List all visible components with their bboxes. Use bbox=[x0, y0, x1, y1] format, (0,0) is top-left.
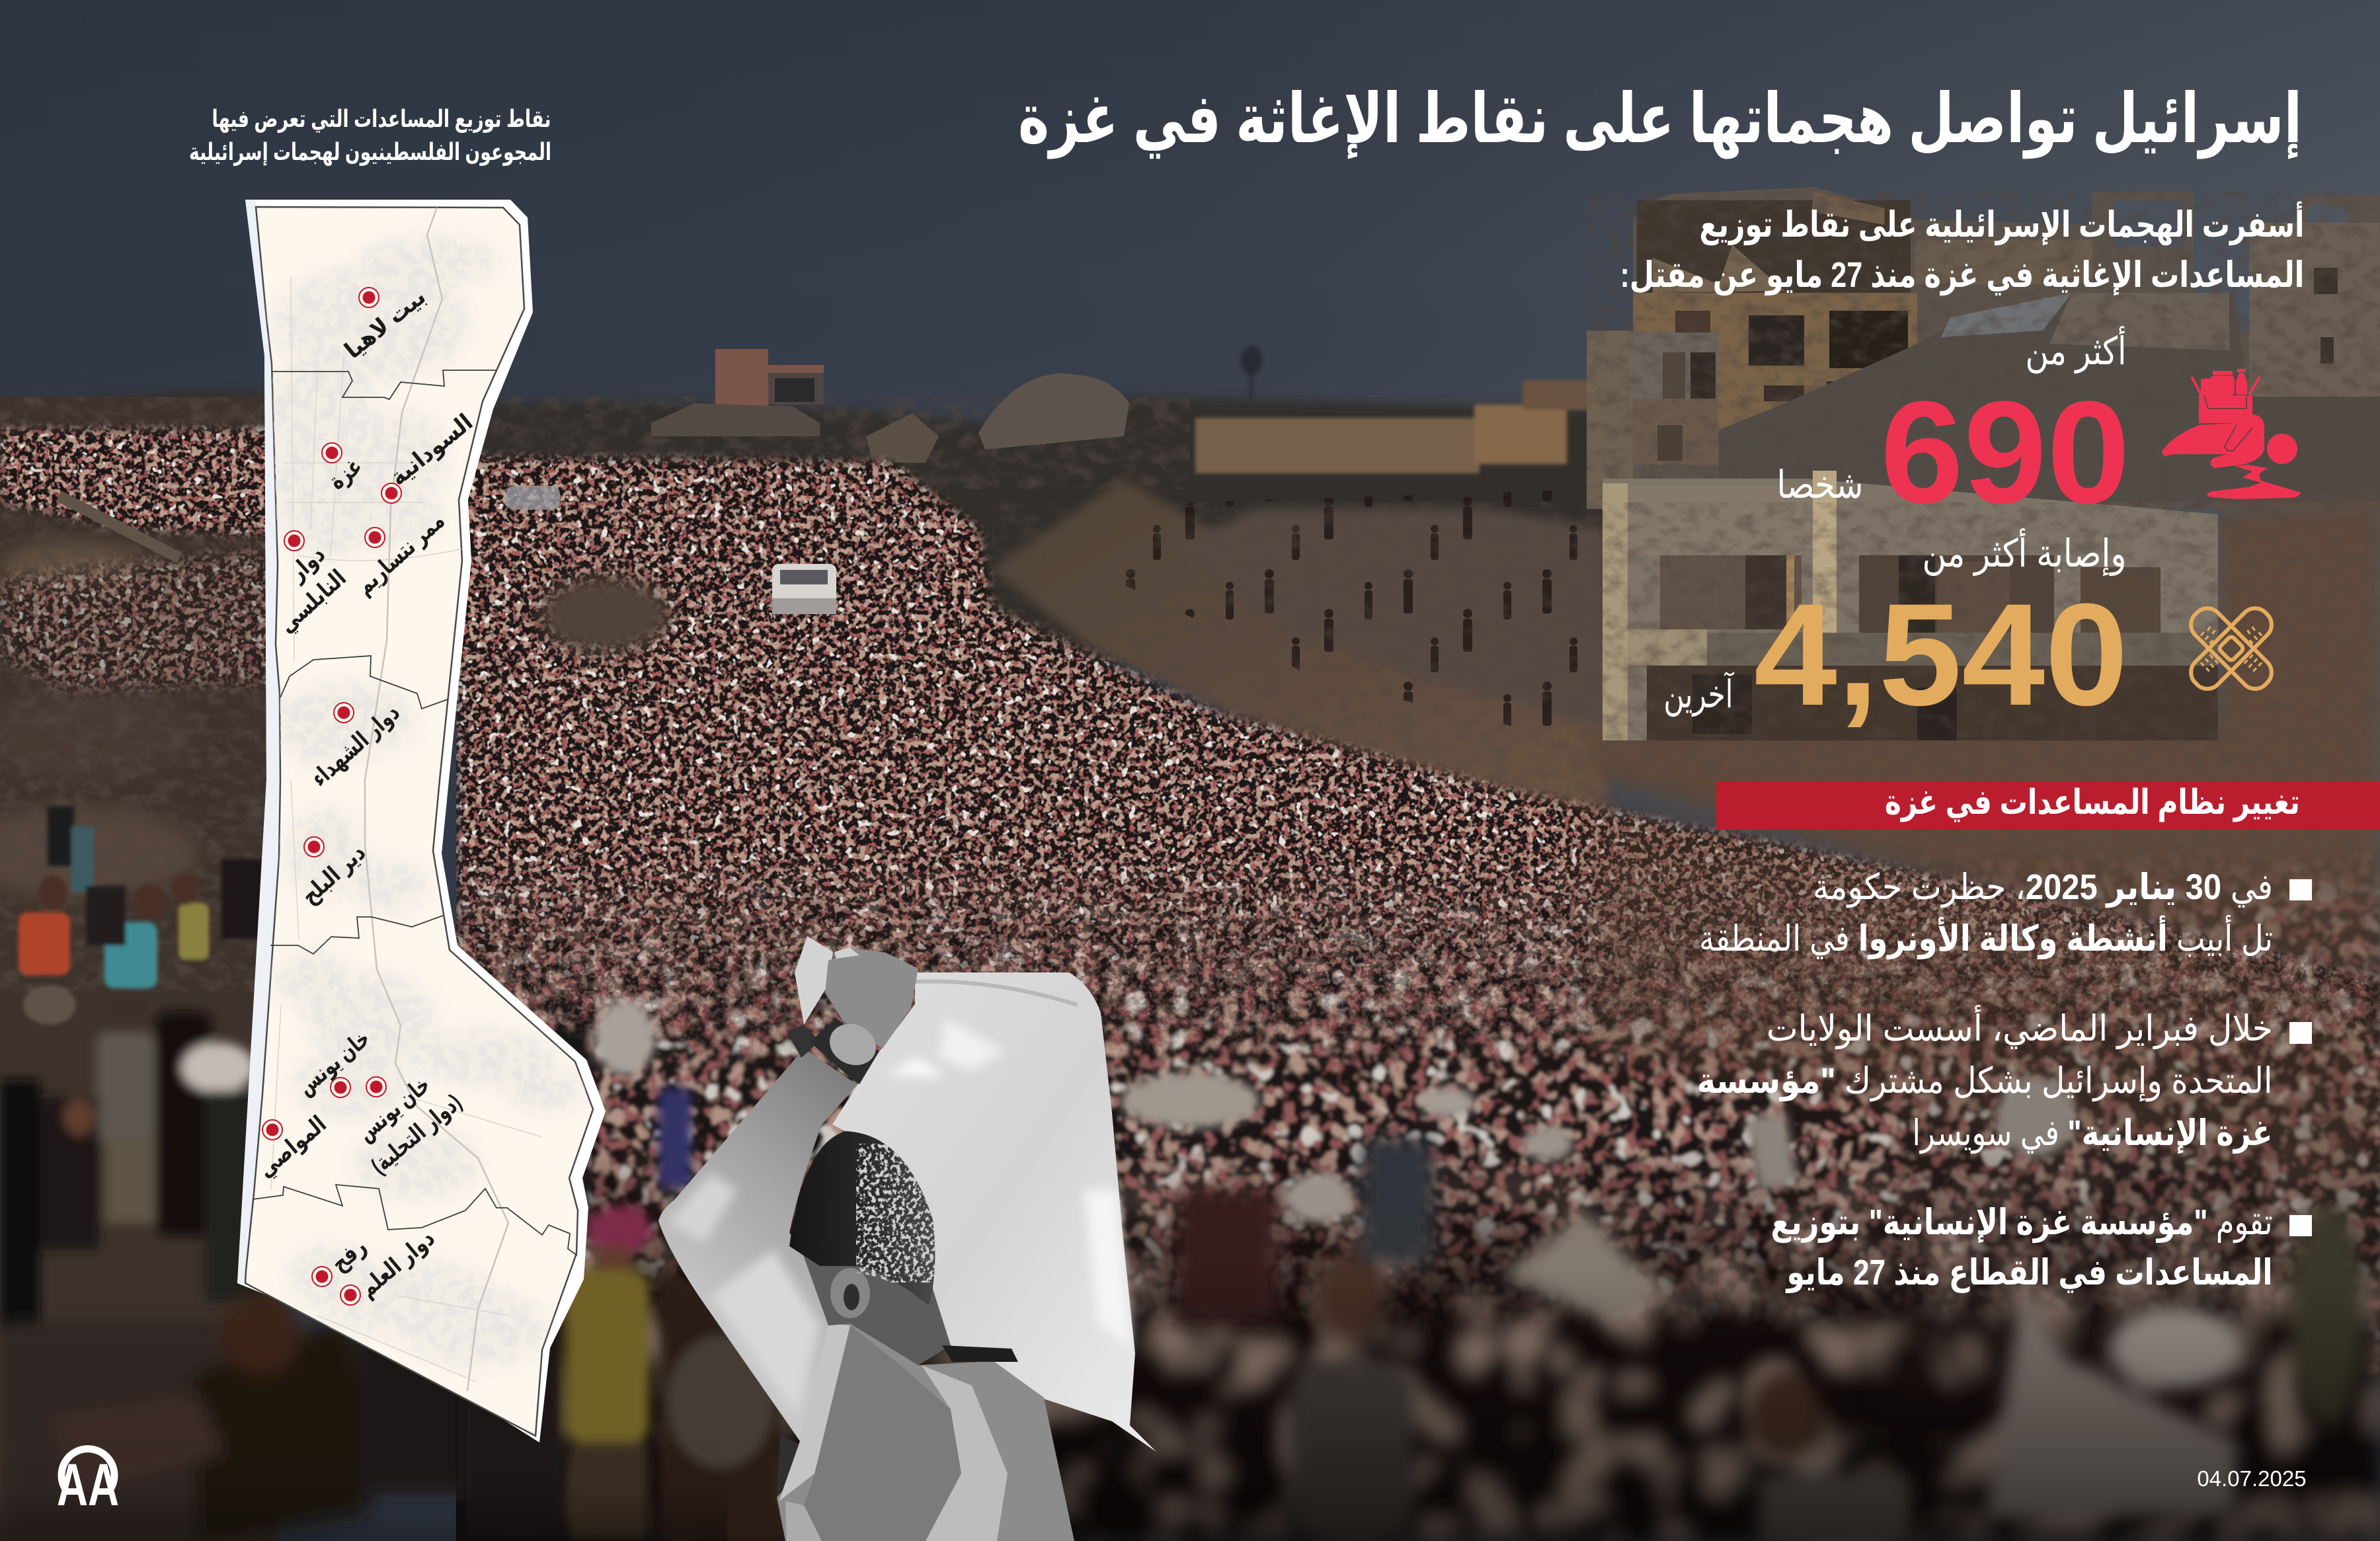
map labels: خان يونس bbox=[292, 1025, 376, 1101]
main crowd bbox=[456, 450, 2380, 1177]
bullet 2: المتحدة وإسرائيل بشكل مشترك "مؤسسة bbox=[1696, 1061, 2273, 1101]
wristwatch bbox=[787, 1017, 883, 1084]
crowd on left side bbox=[0, 422, 266, 699]
map labels: رفح bbox=[327, 1234, 372, 1277]
logo: Anadolu Agency bbox=[57, 1449, 119, 1519]
map labels: خان يونس bbox=[352, 1072, 436, 1147]
map labels: السودانية bbox=[385, 409, 478, 491]
date: 04.07.2025 bbox=[2197, 1466, 2307, 1491]
map labels bbox=[253, 284, 478, 1303]
bullet 2 bbox=[1696, 1005, 2312, 1154]
stat: killed: أكثر من bbox=[2026, 326, 2126, 374]
map labels: بيت لاهيا bbox=[340, 284, 430, 364]
shirt bbox=[777, 1324, 1074, 1541]
point markers bbox=[262, 288, 401, 1305]
left rubble ground bbox=[0, 397, 278, 1541]
distant ruined block bbox=[651, 349, 939, 463]
map caption: نقاط توزيع المساعدات التي تعرض فيها bbox=[212, 105, 551, 133]
section heading bar bbox=[1716, 781, 2380, 830]
stat: injured: آخرين bbox=[1663, 671, 1735, 717]
map labels: (دوار التحلية) bbox=[366, 1089, 467, 1179]
stat: killed: شخصا bbox=[1777, 463, 1863, 506]
governorate borders bbox=[253, 370, 577, 1255]
bullet 3: تقوم "مؤسسة غزة الإنسانية" بتوزيع bbox=[1770, 1203, 2273, 1243]
dirt texture bbox=[992, 502, 2380, 926]
map caption bbox=[189, 105, 551, 166]
bullet 1: في 30 يناير 2025، حظرت حكومة bbox=[1813, 867, 2273, 908]
map labels: دوار الشهداء bbox=[306, 699, 405, 792]
stat: injured: وإصابة أكثر من bbox=[1923, 528, 2126, 576]
logo: Anadolu Agency: AA bbox=[57, 1452, 119, 1519]
bullet 3 bbox=[1770, 1203, 2312, 1293]
map land bbox=[245, 207, 593, 1436]
map labels: غزة bbox=[324, 453, 368, 495]
map white outline bbox=[237, 200, 606, 1442]
map labels: المواصي bbox=[253, 1111, 332, 1183]
map caption: المجوعون الفلسطينيون لهجمات إسرائيلية bbox=[189, 138, 551, 166]
built-up areas bbox=[238, 198, 608, 1454]
top ruined building bbox=[1587, 187, 2380, 509]
map labels: دوار العلم bbox=[354, 1225, 440, 1303]
man carrying sack bbox=[658, 936, 1156, 1541]
bullet 3: المساعدات في القطاع منذ 27 مايو bbox=[1785, 1253, 2273, 1293]
map labels: دوار bbox=[284, 541, 331, 587]
icon: aid box and fallen person bbox=[2162, 369, 2301, 499]
front building bbox=[1603, 471, 2218, 740]
bullet 2: خلال فبراير الماضي، أسست الولايات bbox=[1766, 1005, 2273, 1049]
stat: killed bbox=[1777, 326, 2301, 533]
map labels: دير البلح bbox=[297, 840, 371, 910]
stat: injured: 4,540 bbox=[1754, 573, 2128, 736]
scattered people on slope bbox=[1126, 491, 1577, 726]
horizon rubble bbox=[0, 390, 1653, 661]
bullet 2: غزة الإنسانية" في سويسرا bbox=[1912, 1113, 2273, 1154]
ambulance bbox=[772, 564, 836, 614]
arm bbox=[658, 1048, 857, 1441]
left near figures bbox=[19, 807, 268, 1038]
bullet 1 bbox=[1699, 867, 2312, 959]
head hair bbox=[789, 1131, 942, 1306]
map labels: ممر نتساريم bbox=[351, 508, 450, 600]
bullet 1: تل أبيب أنشطة وكالة الأونروا في المنطقة bbox=[1699, 915, 2273, 959]
neck and face bbox=[801, 1249, 951, 1365]
stat: injured bbox=[1663, 528, 2278, 736]
icon: crossed bandages bbox=[2185, 602, 2278, 695]
dirt slopes bbox=[992, 479, 1606, 833]
sack bbox=[832, 972, 1156, 1452]
stat: killed: 690 bbox=[1880, 371, 2130, 533]
near blurred figures right bbox=[1177, 1137, 2363, 1541]
intro text bbox=[1620, 201, 2305, 296]
map labels: النابلسي bbox=[274, 565, 352, 639]
map of Gaza bbox=[237, 198, 608, 1454]
hand bbox=[825, 949, 918, 1048]
